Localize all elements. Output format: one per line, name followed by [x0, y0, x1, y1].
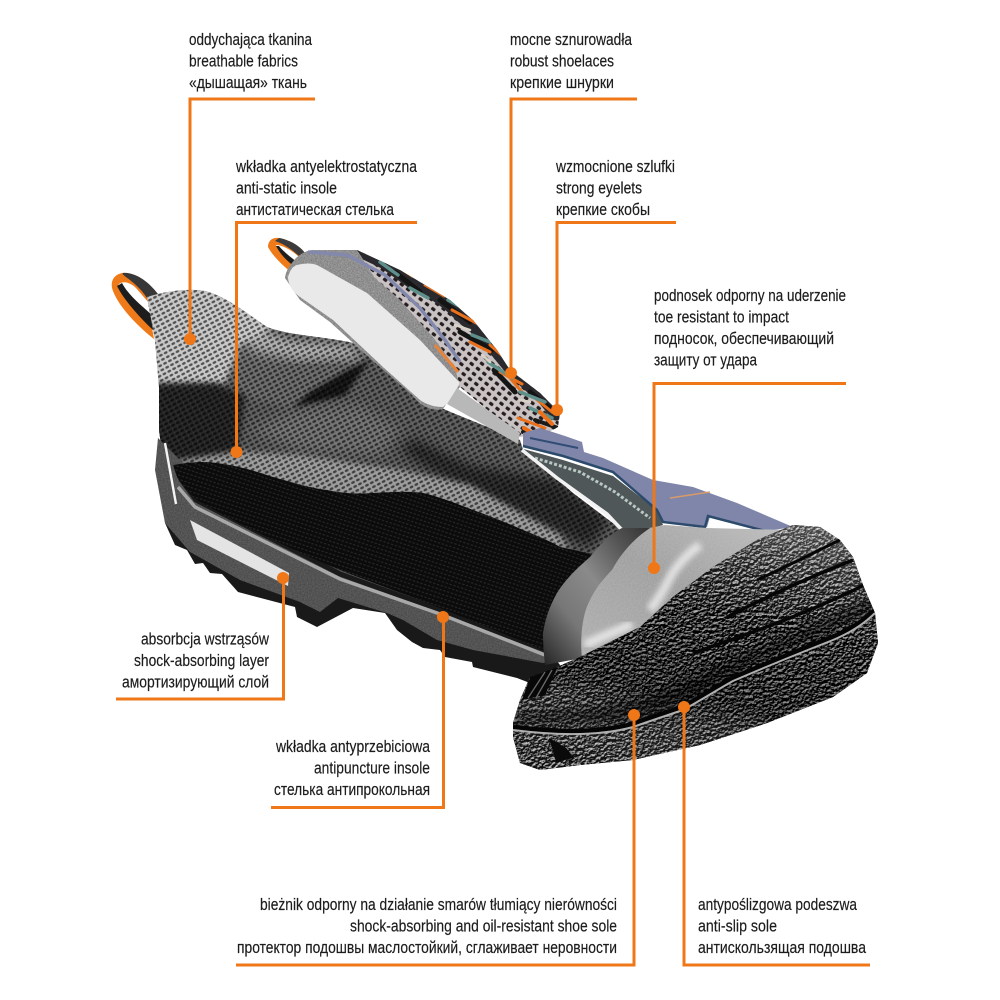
blue denim — [523, 428, 793, 531]
callout: breathable fabrics — [184, 30, 315, 345]
label: strong eyelets: крепкие скобы — [556, 200, 650, 219]
reflective strip — [190, 520, 289, 586]
midsole and tread — [150, 430, 570, 690]
lining: mesh upper — [147, 290, 619, 554]
label: anti-static insole — [235, 157, 417, 219]
label: robust shoelaces: крепкие шнурки — [510, 73, 614, 92]
label: shock-absorbing layer: амортизирующий слой — [122, 672, 269, 692]
label: breathable fabrics: breathable fabrics — [189, 52, 298, 70]
label: anti-static insole: антистатическая стелька — [236, 200, 394, 219]
callout: strong eyelets — [551, 157, 676, 416]
steel toe band — [543, 528, 650, 665]
label: toe resistant to impact: podnosek odporny na uderzenie — [654, 286, 846, 305]
deep shadow above the sole line — [515, 595, 880, 725]
label: antipuncture insole: wkładka antyprzebiciowa — [275, 737, 430, 756]
label: shock-absorbing layer: shock-absorbing layer — [134, 651, 269, 670]
label: oil-resistant shoe sole: bieżnik odporny na działanie smarów tłumiący nierówności — [260, 895, 617, 914]
label: toe resistant to impact: подносок, обеспечивающий — [654, 329, 834, 348]
label: oil-resistant shoe sole — [237, 895, 617, 957]
label: antipuncture insole — [274, 737, 430, 799]
label: anti-static insole: anti-static insole — [236, 178, 337, 198]
tongue pull loop — [268, 238, 305, 273]
callout: oil-resistant shoe sole — [236, 709, 640, 965]
label: shock-absorbing layer — [122, 630, 270, 692]
callout: anti-slip sole — [678, 701, 870, 965]
label: robust shoelaces: robust shoelaces — [510, 52, 614, 70]
laces — [360, 252, 558, 438]
label: anti-slip sole: antypoślizgowa podeszwa — [698, 895, 857, 914]
callout: robust shoelaces — [505, 30, 637, 379]
callout: shock-absorbing layer — [116, 572, 289, 699]
label: toe resistant to impact — [654, 286, 846, 370]
label: breathable fabrics — [189, 30, 312, 92]
label: oil-resistant shoe sole: shock-absorbing and oil-resistant shoe sole — [350, 916, 617, 936]
label: breathable fabrics: oddychająca tkanina — [189, 30, 312, 49]
label: robust shoelaces — [510, 30, 632, 92]
rubber toe cap — [505, 515, 885, 775]
label: robust shoelaces: mocne sznurowadła — [510, 30, 632, 49]
label: strong eyelets — [555, 157, 675, 219]
callout: antipuncture insole — [271, 611, 449, 808]
white insert — [288, 264, 460, 407]
callout: toe resistant to impact — [648, 286, 846, 574]
felt tongue border — [285, 250, 460, 410]
heel pull loop — [112, 273, 158, 339]
label: oil-resistant shoe sole: протектор подошвы маслостойкий, сглаживает неровности — [237, 938, 617, 957]
ribs near the heel side — [522, 666, 558, 700]
callout: anti-static insole — [230, 157, 417, 458]
perforated mesh with laces — [357, 250, 560, 437]
label: anti-slip sole: anti-slip sole — [698, 916, 777, 936]
tongue — [268, 238, 560, 444]
label: antipuncture insole: antipuncture insole — [314, 758, 430, 778]
steel toe cap — [581, 525, 782, 656]
grey binding — [447, 388, 520, 444]
illustration: cut-away safety shoe — [112, 238, 885, 775]
blue edge stitching — [308, 252, 460, 362]
insole — [173, 462, 620, 650]
label: toe resistant to impact: защиту от удара — [654, 350, 757, 370]
label: toe resistant to impact: toe resistant to impact — [654, 308, 789, 326]
label: breathable fabrics: «дышащая» ткань — [189, 73, 307, 92]
label: strong eyelets: wzmocnione szlufki — [555, 157, 675, 176]
label: anti-static insole: wkładka antyelektrostatyczna — [235, 157, 417, 176]
denim flaps — [520, 428, 793, 532]
label: antipuncture insole: стелька антипрокольная — [274, 780, 430, 799]
label: shock-absorbing layer: absorbcja wstrząsów — [141, 630, 270, 648]
label: anti-slip sole — [698, 895, 866, 957]
label: strong eyelets: strong eyelets — [556, 178, 642, 198]
stitched under-layer — [520, 448, 663, 532]
label: anti-slip sole: антискользящая подошва — [698, 938, 866, 957]
